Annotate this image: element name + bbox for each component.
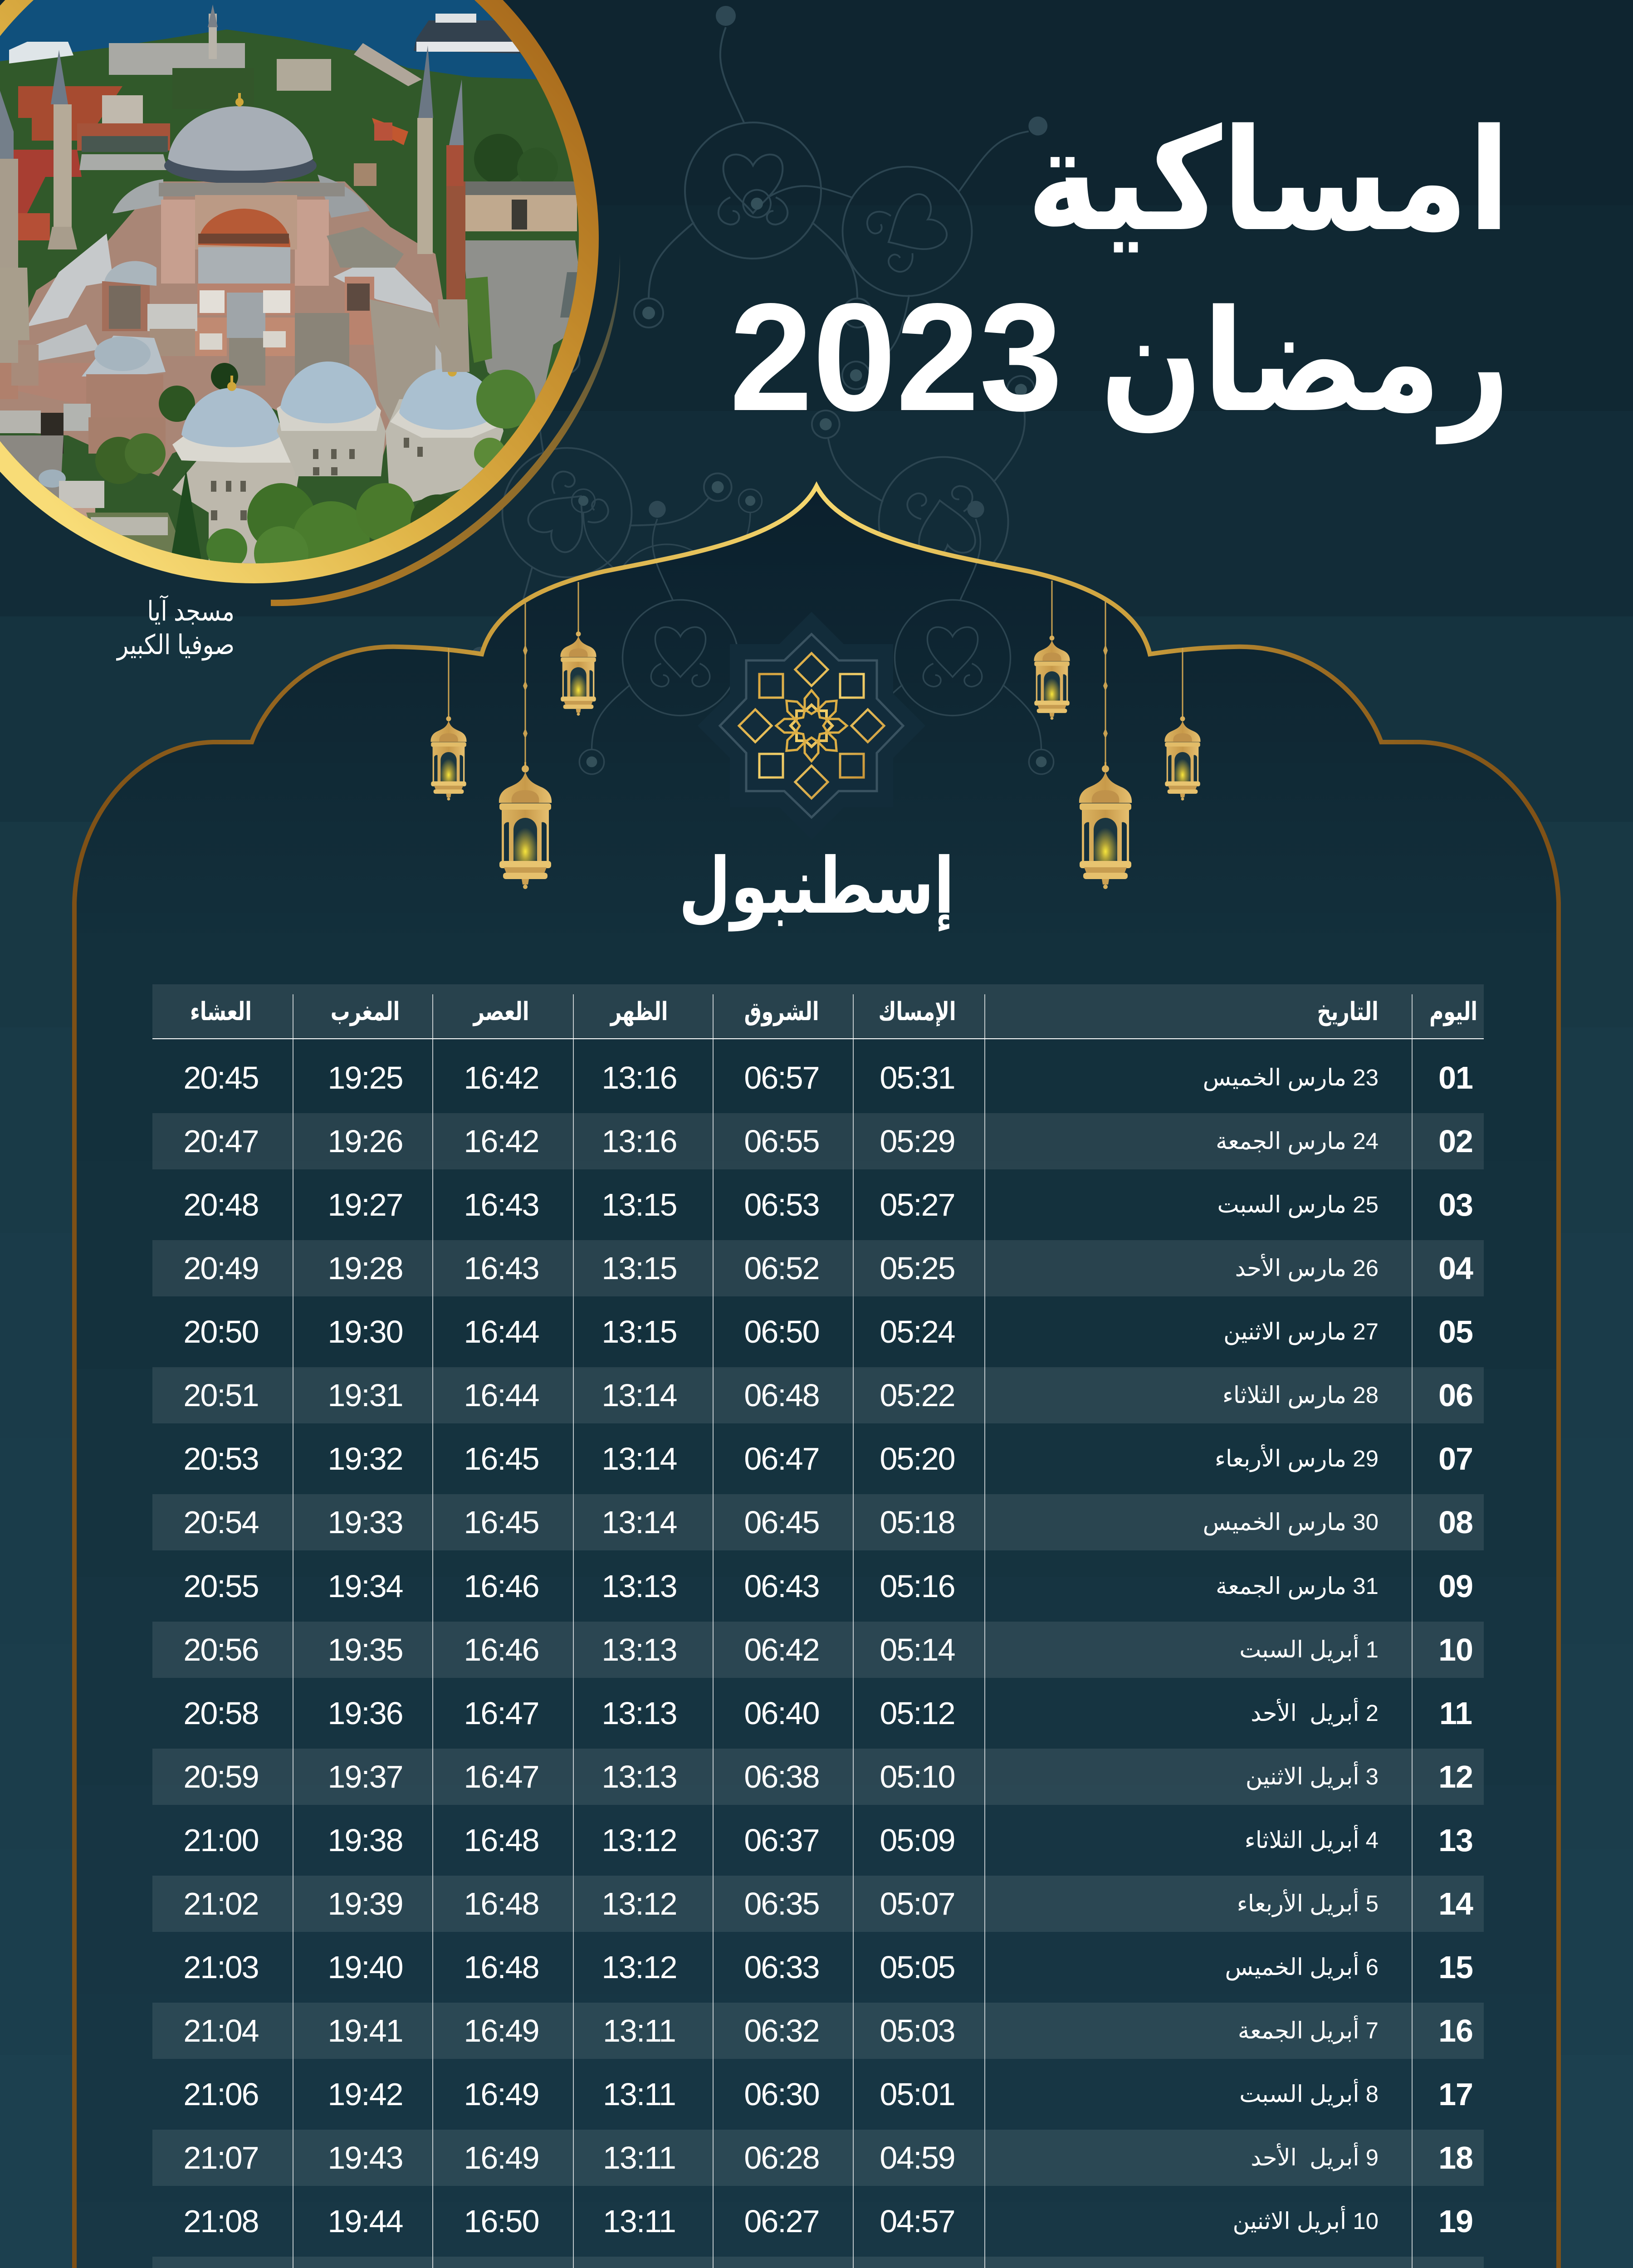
row 02 bbox=[152, 1113, 1484, 1169]
header row: اليوم bbox=[1429, 997, 1477, 1026]
decorative floral mandala bbox=[368, 6, 1115, 747]
row 08: 05:18 bbox=[880, 1505, 955, 1540]
row 06: 05:22 bbox=[880, 1378, 955, 1413]
title: 2023 bbox=[729, 272, 1063, 443]
header row: الشروق bbox=[744, 997, 819, 1026]
row 19: 19:44 bbox=[328, 2204, 403, 2239]
row 05: 27 مارس الاثنين bbox=[1223, 1319, 1379, 1344]
header row: الإمساك bbox=[879, 997, 956, 1026]
row 08: 20:54 bbox=[183, 1505, 259, 1540]
row 15 bbox=[152, 1939, 1484, 1995]
row 03: 05:27 bbox=[880, 1187, 955, 1222]
row 13: 4 أبريل الثلاثاء bbox=[1245, 1827, 1379, 1853]
row 10: 1 أبريل السبت bbox=[1239, 1637, 1379, 1662]
header row: الظهر bbox=[611, 997, 668, 1026]
title: امساكية bbox=[1027, 102, 1510, 259]
row 02: 13:16 bbox=[601, 1124, 677, 1159]
row 10: 19:35 bbox=[328, 1632, 403, 1667]
lantern left inner bbox=[560, 582, 596, 716]
row 17: 05:01 bbox=[880, 2077, 955, 2112]
row 02: 05:29 bbox=[880, 1124, 955, 1159]
row 15: 19:40 bbox=[328, 1950, 403, 1985]
row 13 bbox=[152, 1812, 1484, 1868]
row 09: 09 bbox=[1438, 1569, 1473, 1604]
row 16: 13:11 bbox=[603, 2013, 675, 2048]
row 14: 06:35 bbox=[744, 1886, 819, 1921]
row 18 bbox=[152, 2130, 1484, 2186]
lantern right outer bbox=[1164, 648, 1201, 801]
row 16: 21:04 bbox=[183, 2013, 259, 2048]
row 06: 06 bbox=[1438, 1378, 1473, 1413]
row 04: 04 bbox=[1438, 1251, 1473, 1286]
row 07: 13:14 bbox=[601, 1441, 677, 1476]
arch panel lower body bbox=[74, 953, 1559, 2268]
header row bbox=[152, 984, 1484, 1039]
row 04 bbox=[152, 1240, 1484, 1296]
photo caption bbox=[116, 595, 235, 661]
row 16 bbox=[152, 2003, 1484, 2059]
row 05: 16:44 bbox=[464, 1314, 539, 1349]
row 14: 21:02 bbox=[183, 1886, 259, 1921]
row 14: 16:48 bbox=[464, 1886, 539, 1921]
row 12 bbox=[152, 1749, 1484, 1805]
row 12: 16:47 bbox=[464, 1759, 539, 1794]
row 19 bbox=[152, 2193, 1484, 2249]
row 19: 19 bbox=[1438, 2204, 1473, 2239]
row 16: 06:32 bbox=[744, 2013, 819, 2048]
header row: العصر bbox=[473, 997, 529, 1026]
photo caption: صوفيا الكبير bbox=[116, 629, 235, 661]
row 09: 06:43 bbox=[744, 1569, 819, 1604]
row 09: 31 مارس الجمعة bbox=[1216, 1573, 1379, 1599]
row 06: 28 مارس الثلاثاء bbox=[1222, 1382, 1379, 1408]
row 01: 19:25 bbox=[328, 1060, 403, 1095]
row 17: 13:11 bbox=[603, 2077, 675, 2112]
row 05: 19:30 bbox=[328, 1314, 403, 1349]
row 01: 06:57 bbox=[744, 1060, 819, 1095]
row 10: 06:42 bbox=[744, 1632, 819, 1667]
header artwork bbox=[0, 0, 1633, 953]
row 18: 21:07 bbox=[183, 2140, 259, 2175]
row 03: 13:15 bbox=[601, 1187, 677, 1222]
row 17: 21:06 bbox=[183, 2077, 259, 2112]
row 07: 20:53 bbox=[183, 1441, 259, 1476]
row 15: 6 أبريل الخميس bbox=[1225, 1954, 1379, 1980]
row 03 bbox=[152, 1177, 1484, 1233]
row 01: 01 bbox=[1438, 1060, 1473, 1095]
row 08: 08 bbox=[1438, 1505, 1473, 1540]
header row: العشاء bbox=[190, 997, 252, 1026]
row 04: 19:28 bbox=[328, 1251, 403, 1286]
title: رمضان bbox=[1100, 284, 1510, 445]
row 18: 04:59 bbox=[880, 2140, 955, 2175]
row 13: 21:00 bbox=[183, 1823, 259, 1858]
row 01: 05:31 bbox=[880, 1060, 955, 1095]
row 15: 05:05 bbox=[880, 1950, 955, 1985]
row 13: 19:38 bbox=[328, 1823, 403, 1858]
row 17 bbox=[152, 2066, 1484, 2122]
row 07: 06:47 bbox=[744, 1441, 819, 1476]
city heading: إسطنبول bbox=[679, 843, 954, 931]
row 17: 8 أبريل السبت bbox=[1239, 2081, 1379, 2107]
row 18: 06:28 bbox=[744, 2140, 819, 2175]
row 10: 16:46 bbox=[464, 1632, 539, 1667]
title bbox=[729, 102, 1510, 445]
row 18: 13:11 bbox=[603, 2140, 675, 2175]
row 15: 13:12 bbox=[601, 1950, 677, 1985]
row 03: 03 bbox=[1438, 1187, 1473, 1222]
row 13: 13:12 bbox=[601, 1823, 677, 1858]
lantern right inner bbox=[1034, 581, 1070, 720]
row 19: 21:08 bbox=[183, 2204, 259, 2239]
row 01: 16:42 bbox=[464, 1060, 539, 1095]
header row: المغرب bbox=[331, 997, 400, 1026]
row 02: 02 bbox=[1438, 1124, 1473, 1159]
row 17: 16:49 bbox=[464, 2077, 539, 2112]
row 08: 06:45 bbox=[744, 1505, 819, 1540]
row 03: 06:53 bbox=[744, 1187, 819, 1222]
row 18: 18 bbox=[1438, 2140, 1473, 2175]
row 05: 13:15 bbox=[601, 1314, 677, 1349]
row 17: 17 bbox=[1438, 2077, 1473, 2112]
row 11: 06:40 bbox=[744, 1696, 819, 1731]
row 12: 05:10 bbox=[880, 1759, 955, 1794]
row 20 bbox=[152, 2257, 1484, 2268]
row 18: 16:49 bbox=[464, 2140, 539, 2175]
row 04: 06:52 bbox=[744, 1251, 819, 1286]
row 07: 16:45 bbox=[464, 1441, 539, 1476]
row 07: 29 مارس الأربعاء bbox=[1215, 1446, 1379, 1471]
row 04: 20:49 bbox=[183, 1251, 259, 1286]
thin gold arc beside photo bbox=[271, 254, 620, 606]
row 16: 19:41 bbox=[328, 2013, 403, 2048]
row 06: 20:51 bbox=[183, 1378, 259, 1413]
row 13: 13 bbox=[1438, 1823, 1473, 1858]
row 10: 20:56 bbox=[183, 1632, 259, 1667]
row 19: 06:27 bbox=[744, 2204, 819, 2239]
eight-point star ornament bbox=[698, 612, 925, 840]
row 03: 19:27 bbox=[328, 1187, 403, 1222]
row 10: 13:13 bbox=[601, 1632, 677, 1667]
row 04: 26 مارس الأحد bbox=[1235, 1255, 1379, 1281]
lantern right middle bbox=[1079, 601, 1132, 889]
row 11: 13:13 bbox=[601, 1696, 677, 1731]
row 15: 16:48 bbox=[464, 1950, 539, 1985]
row 06: 06:48 bbox=[744, 1378, 819, 1413]
row 12: 12 bbox=[1438, 1759, 1473, 1794]
row 19: 16:50 bbox=[464, 2204, 539, 2239]
row 16: 7 أبريل الجمعة bbox=[1238, 2018, 1379, 2043]
row 11 bbox=[152, 1685, 1484, 1741]
row 07: 19:32 bbox=[328, 1441, 403, 1476]
row 10 bbox=[152, 1622, 1484, 1678]
row 06: 13:14 bbox=[601, 1378, 677, 1413]
row 18: 19:43 bbox=[328, 2140, 403, 2175]
left frame line bbox=[72, 953, 77, 2268]
row 14: 14 bbox=[1438, 1886, 1473, 1921]
row 06: 16:44 bbox=[464, 1378, 539, 1413]
row 02: 20:47 bbox=[183, 1124, 259, 1159]
row 03: 16:43 bbox=[464, 1187, 539, 1222]
row 09: 16:46 bbox=[464, 1569, 539, 1604]
row 11: 20:58 bbox=[183, 1696, 259, 1731]
row 02: 06:55 bbox=[744, 1124, 819, 1159]
row 02: 16:42 bbox=[464, 1124, 539, 1159]
row 10: 05:14 bbox=[880, 1632, 955, 1667]
prayer time table bbox=[152, 984, 1484, 2268]
row 09 bbox=[152, 1558, 1484, 1614]
row 15: 21:03 bbox=[183, 1950, 259, 1985]
mosque arch top bbox=[74, 486, 1559, 953]
row 05: 05:24 bbox=[880, 1314, 955, 1349]
row 08: 19:33 bbox=[328, 1505, 403, 1540]
row 15: 06:33 bbox=[744, 1950, 819, 1985]
row 19: 13:11 bbox=[603, 2204, 675, 2239]
row 08: 30 مارس الخميس bbox=[1203, 1509, 1379, 1535]
lantern left outer bbox=[430, 648, 467, 801]
row 05: 06:50 bbox=[744, 1314, 819, 1349]
row 02: 19:26 bbox=[328, 1124, 403, 1159]
row 12: 3 أبريل الاثنين bbox=[1246, 1764, 1379, 1789]
right frame line bbox=[1556, 953, 1561, 2268]
row 16: 05:03 bbox=[880, 2013, 955, 2048]
row 05: 20:50 bbox=[183, 1314, 259, 1349]
row 07 bbox=[152, 1431, 1484, 1487]
row 04: 13:15 bbox=[601, 1251, 677, 1286]
row 14: 5 أبريل الأربعاء bbox=[1237, 1891, 1379, 1916]
row 02: 24 مارس الجمعة bbox=[1216, 1128, 1379, 1154]
row 03: 25 مارس السبت bbox=[1217, 1192, 1379, 1217]
row 09: 13:13 bbox=[601, 1569, 677, 1604]
row 09: 19:34 bbox=[328, 1569, 403, 1604]
row 01: 20:45 bbox=[183, 1060, 259, 1095]
lantern left middle bbox=[499, 601, 552, 889]
row 06: 19:31 bbox=[328, 1378, 403, 1413]
photo ring bbox=[0, 0, 599, 583]
row 05: 05 bbox=[1438, 1314, 1473, 1349]
row 04: 16:43 bbox=[464, 1251, 539, 1286]
row 01: 23 مارس الخميس bbox=[1203, 1065, 1379, 1090]
row 08: 13:14 bbox=[601, 1505, 677, 1540]
row 11: 16:47 bbox=[464, 1696, 539, 1731]
row 01 bbox=[152, 1050, 1484, 1106]
row 14: 19:39 bbox=[328, 1886, 403, 1921]
row 17: 19:42 bbox=[328, 2077, 403, 2112]
header row: التاريخ bbox=[1317, 997, 1379, 1026]
row 10: 10 bbox=[1438, 1632, 1473, 1667]
row 12: 20:59 bbox=[183, 1759, 259, 1794]
row 12: 19:37 bbox=[328, 1759, 403, 1794]
row 13: 16:48 bbox=[464, 1823, 539, 1858]
photo caption: مسجد آيا bbox=[147, 595, 235, 626]
row 14: 13:12 bbox=[601, 1886, 677, 1921]
row 12: 13:13 bbox=[601, 1759, 677, 1794]
row 07: 05:20 bbox=[880, 1441, 955, 1476]
row 07: 07 bbox=[1438, 1441, 1473, 1476]
row 12: 06:38 bbox=[744, 1759, 819, 1794]
row 01: 13:16 bbox=[601, 1060, 677, 1095]
row 16: 16:49 bbox=[464, 2013, 539, 2048]
row 11: 11 bbox=[1439, 1696, 1472, 1731]
row 18: 9 أبريل الأحد bbox=[1251, 2145, 1379, 2170]
row 13: 05:09 bbox=[880, 1823, 955, 1858]
row 11: 19:36 bbox=[328, 1696, 403, 1731]
row 14 bbox=[152, 1876, 1484, 1932]
row 19: 04:57 bbox=[880, 2204, 955, 2239]
row 16: 16 bbox=[1438, 2013, 1473, 2048]
row 05 bbox=[152, 1304, 1484, 1360]
row 09: 20:55 bbox=[183, 1569, 259, 1604]
row 06 bbox=[152, 1367, 1484, 1423]
row 19: 10 أبريل الاثنين bbox=[1233, 2208, 1379, 2234]
row 04: 05:25 bbox=[880, 1251, 955, 1286]
row 14: 05:07 bbox=[880, 1886, 955, 1921]
photo: Hagia Sophia illustration bbox=[0, 0, 579, 563]
row 08 bbox=[152, 1494, 1484, 1550]
row 11: 2 أبريل الأحد bbox=[1251, 1700, 1379, 1726]
row 17: 06:30 bbox=[744, 2077, 819, 2112]
row 13: 06:37 bbox=[744, 1823, 819, 1858]
row 15: 15 bbox=[1438, 1950, 1473, 1985]
row 03: 20:48 bbox=[183, 1187, 259, 1222]
row 11: 05:12 bbox=[880, 1696, 955, 1731]
row 08: 16:45 bbox=[464, 1505, 539, 1540]
row 09: 05:16 bbox=[880, 1569, 955, 1604]
